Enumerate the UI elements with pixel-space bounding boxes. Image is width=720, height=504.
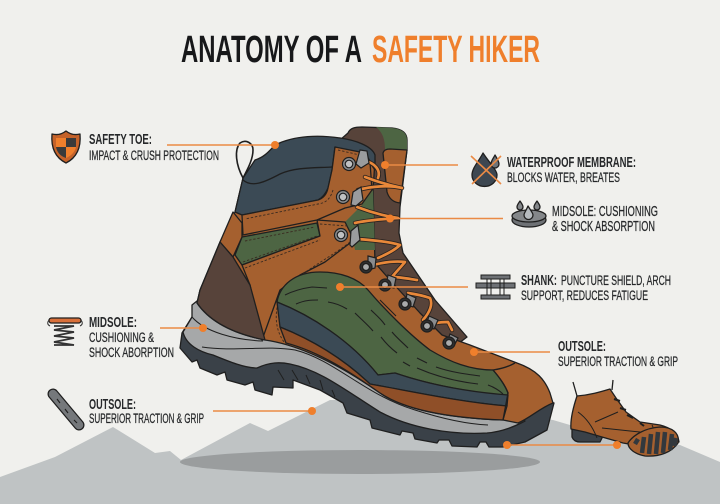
heel counter [197,242,265,340]
outsole left label: OUTSOLE: [89,396,136,413]
outsole right label: OUTSOLE: [558,338,606,355]
waterproof membrane label: BLOCKS WATER, BREATES [507,170,620,185]
outsole [180,301,554,447]
midsole right label: & SHOCK ABSORPTION [552,219,655,235]
laces [355,160,452,330]
midsole right label: MIDSOLE: CUSHIONING [552,204,658,220]
icon: shank [476,275,515,299]
waterproof membrane label [507,154,636,185]
title: ANATOMY OF A [181,29,362,71]
safety toe label [89,131,219,163]
leader lines and dots [160,141,621,449]
safety toe label: IMPACT & CRUSH PROTECTION [89,148,219,163]
icon: shield [52,131,80,163]
midsole left label [89,314,174,360]
icon: spring [48,318,82,345]
eyelets [334,150,458,349]
midsole left label: MIDSOLE: [89,314,137,331]
collar [235,136,375,215]
small boot upper [571,389,679,446]
icon: water drop crossed [471,153,501,186]
title: SAFETY HIKER [372,29,540,71]
outsole left label: SUPERIOR TRACTION & GRIP [89,411,204,426]
small boot tread [628,427,678,456]
outsole right label [558,338,678,369]
boot illustration [180,127,554,447]
midsole [183,301,525,433]
midsole left label: CUSHIONING & [89,330,154,345]
midsole left label: SHOCK ABORPTION [89,345,174,360]
back strip [220,212,242,257]
midsole right label [552,204,658,235]
small boot heel [572,428,603,442]
outsole left label [89,396,204,426]
pull loop [236,141,253,178]
small boot showing tread [571,380,679,456]
upper body leather [197,138,553,423]
shank label [521,272,671,303]
icon: outsole bar [53,394,79,425]
safety toe label: SAFETY TOE: [89,131,152,148]
green gusset [345,190,375,250]
green vamp panel [277,272,508,396]
waterproof membrane label: WATERPROOF MEMBRANE: [507,154,636,171]
brown lower band [280,327,507,420]
toe cap seam [493,363,515,420]
shank label: SUPPORT, REDUCES FATIGUE [521,288,648,303]
green side band [235,223,320,265]
dark side band [277,302,508,406]
upper eyelet panel [242,147,372,235]
mountain background [0,400,720,504]
lower eyelet panel [242,220,354,342]
shank label: SHANK: [521,272,557,289]
boot tongue [340,127,467,350]
icon: midsole cushion [512,201,546,227]
